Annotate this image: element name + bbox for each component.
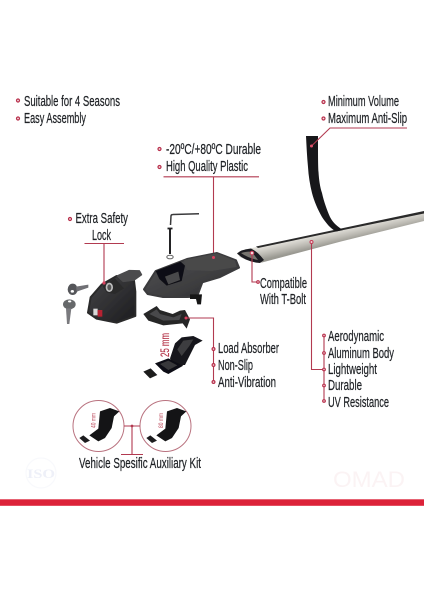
load absorber pad	[143, 306, 190, 329]
watermark: ISO: ISO	[27, 466, 55, 481]
load absorber spacer blocks	[143, 336, 203, 378]
callout: extra safety lock: Extra Safety	[76, 210, 128, 227]
rubber strip leader line	[310, 128, 407, 148]
callout: extra safety lock	[68, 210, 128, 283]
auxiliary kit connector and label: Vehicle Spesific Auxiliary Kit	[79, 455, 202, 472]
hex key	[170, 214, 199, 225]
callout: rubber strip features	[322, 93, 407, 127]
leader dots on parts	[102, 256, 215, 285]
lock foot part	[88, 271, 141, 323]
red footer band	[0, 499, 424, 506]
callout: load absorber	[184, 316, 279, 391]
callout: compatible with T-bolt: With T-Bolt	[260, 291, 307, 308]
feature list: seasons and assembly	[16, 93, 120, 127]
callout: rail properties: Durable	[328, 377, 362, 394]
feature list: seasons and assembly: Suitable for 4 Seasons	[24, 93, 120, 110]
callout: rail properties: Aerodynamic	[328, 328, 384, 345]
callout: durable high quality plastic: -20ºC/+80ºC Durable	[166, 141, 261, 158]
auxiliary kit: 80 mm circle: 80 mm	[159, 413, 165, 428]
aluminum roof rail	[237, 211, 424, 263]
callout: durable high quality plastic: High Quality Plastic	[166, 158, 248, 175]
callout: rail properties: Lightweight	[328, 361, 378, 378]
watermark: OMAD: OMAD	[333, 467, 405, 492]
rubber strip	[306, 136, 343, 232]
callout: durable high quality plastic	[158, 141, 261, 257]
callout: load absorber: Load Absorber	[218, 340, 279, 357]
callout: compatible with T-bolt	[250, 251, 307, 308]
callout: extra safety lock: Lock	[92, 227, 111, 244]
auxiliary kit: 40 mm circle: 40 mm	[92, 413, 98, 428]
feature list: seasons and assembly: Easy Assembly	[24, 110, 86, 127]
callout: load absorber: Non-Slip	[218, 357, 253, 374]
watermark: ISO	[26, 458, 56, 488]
callout: compatible with T-bolt: Compatible	[260, 275, 307, 292]
auxiliary kit: 80 mm circle	[140, 400, 191, 452]
bolt and washer	[167, 228, 173, 259]
keys	[63, 284, 88, 324]
auxiliary kit connector and label	[79, 425, 202, 472]
callout: load absorber: Anti-Vibration	[218, 374, 276, 391]
dimension label: 25 mm: 25 mm	[160, 333, 172, 357]
callout: rail properties	[310, 240, 394, 411]
auxiliary kit: 40 mm circle	[73, 400, 124, 452]
main foot housing	[144, 253, 239, 304]
